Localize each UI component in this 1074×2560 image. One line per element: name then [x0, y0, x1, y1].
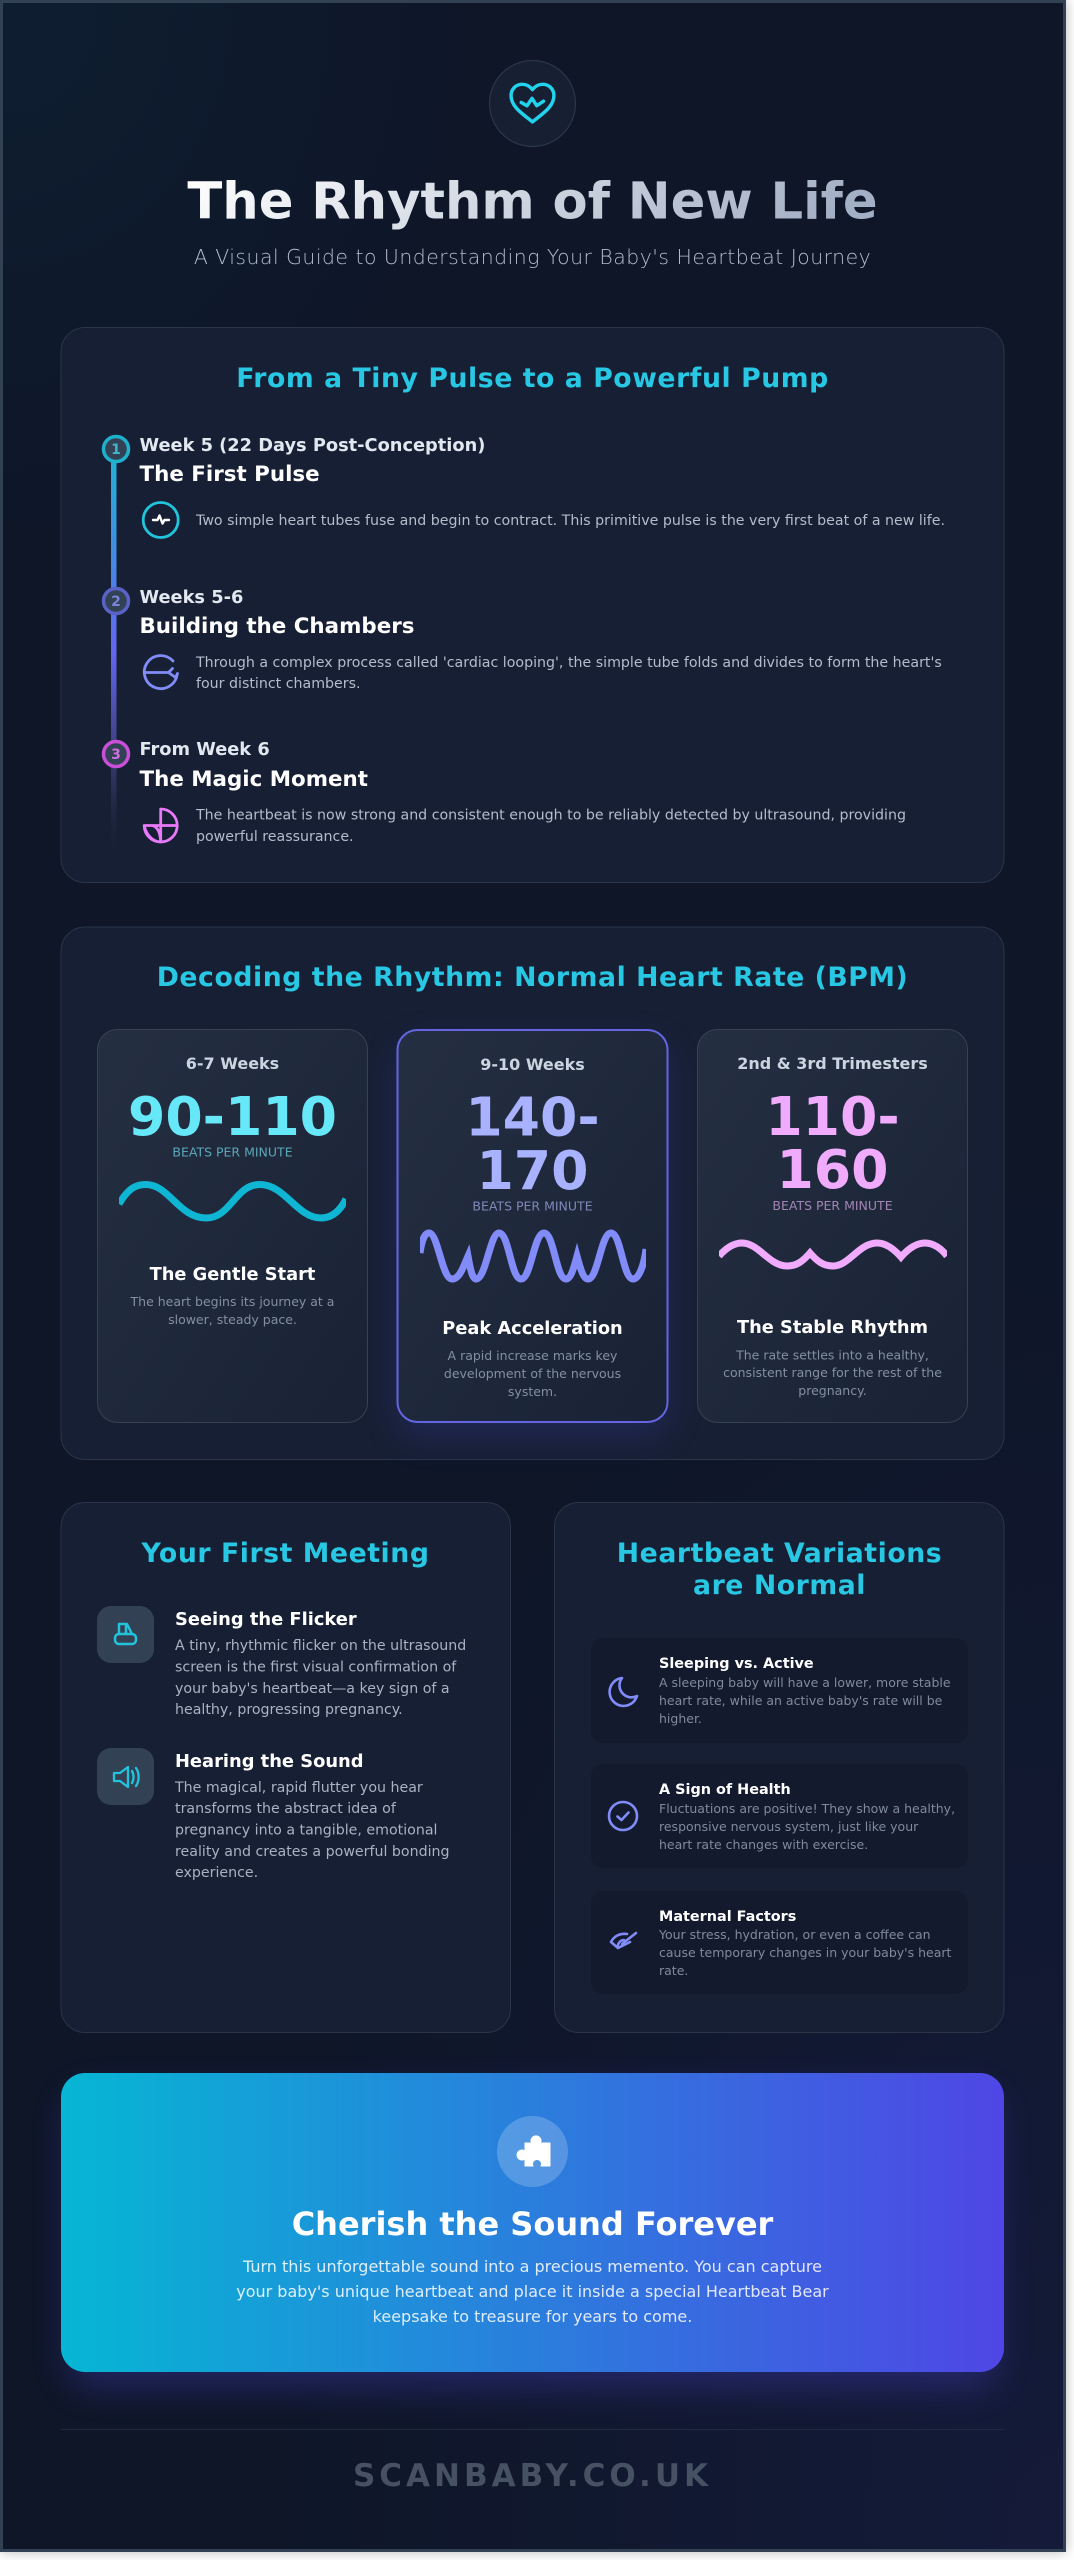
item: hearing the sound: reality and creates a powerful bonding [175, 1844, 450, 1860]
card: 9-10 weeks: A rapid increase marks key [448, 1348, 618, 1363]
item: sign of health: heart rate changes with exercise. [659, 1837, 868, 1852]
card: 6-7 weeks: The Gentle Start [150, 1264, 316, 1285]
item: hearing the sound: transforms the abstract idea of [175, 1801, 397, 1817]
card: 6-7 weeks: BEATS PER MINUTE [172, 1144, 293, 1160]
item: seeing the flicker: Seeing the Flicker [175, 1609, 357, 1630]
step 1: The First Pulse [140, 462, 320, 487]
card: trimesters: 160 [776, 1138, 889, 1201]
card: 9-10 weeks: 140- [465, 1086, 600, 1148]
item: sleeping vs active: Sleeping vs. Active [659, 1656, 814, 1672]
icon: heart with pulse [490, 60, 576, 146]
heading: cherish: Cherish the Sound Forever [292, 2205, 774, 2243]
item: maternal factors: Maternal Factors [659, 1909, 796, 1925]
step 2: Through a complex process called 'cardiac looping', the simple tube folds and divides to form the heart's [195, 655, 942, 671]
step 2: Weeks 5-6 [140, 587, 243, 608]
item: hearing the sound: Hearing the Sound [175, 1751, 364, 1772]
item: sleeping vs active: heart rate, while an active baby's rate will be [659, 1693, 943, 1708]
icon: moon [610, 1678, 637, 1706]
card: 6-7 weeks: 90-110 [128, 1085, 337, 1148]
item: sign of health: A Sign of Health [659, 1782, 791, 1798]
text: cherish body [236, 2257, 829, 2326]
text: cherish body: your baby's unique heartbeat and place it inside a special Heartbeat Bear [236, 2282, 829, 2301]
icon: pie of chambers [144, 809, 177, 842]
heading: variations [617, 1538, 942, 1601]
panel: heart rate [61, 927, 1004, 1460]
timeline line [111, 449, 116, 854]
item: seeing the flicker: healthy, progressing pregnancy. [175, 1702, 403, 1718]
step 2: four distinct chambers. [196, 676, 360, 692]
card: 9-10 weeks [397, 1030, 668, 1436]
footer brand: SCANBABY.CO.UK [353, 2458, 712, 2494]
panel: variations [554, 1502, 1004, 2032]
card: trimesters: pregnancy. [798, 1383, 867, 1398]
step 1 [104, 435, 945, 538]
step 3: From Week 6 [140, 739, 270, 760]
item: sleeping vs active [591, 1638, 968, 1743]
card: trimesters: consistent range for the rest of the [723, 1365, 942, 1380]
card: 9-10 weeks: 170 [476, 1139, 589, 1202]
item: seeing the flicker: A tiny, rhythmic flicker on the ultrasound [175, 1638, 466, 1654]
card: 9-10 weeks: BEATS PER MINUTE [472, 1198, 593, 1214]
card: 9-10 weeks: development of the nervous [444, 1366, 621, 1381]
step 1: Two simple heart tubes fuse and begin to contract. This primitive pulse is the very first beat of a new life. [195, 513, 945, 529]
step 3 [104, 739, 906, 845]
step 1: Week 5 (22 Days Post-Conception) [140, 435, 485, 456]
icon: check circle [609, 1802, 637, 1830]
item: maternal factors [591, 1891, 968, 1994]
wave chart: peak [420, 1230, 646, 1282]
card: 9-10 weeks: Peak Acceleration [442, 1318, 623, 1339]
icon: gauge [611, 1933, 636, 1948]
card: 9-10 weeks: 9-10 Weeks [480, 1055, 585, 1074]
card: trimesters: The Stable Rhythm [737, 1317, 928, 1338]
item: maternal factors: Your stress, hydration, or even a coffee can [658, 1927, 931, 1942]
step 2: Building the Chambers [140, 614, 414, 639]
item: seeing the flicker [97, 1606, 466, 1718]
icon: puzzle piece [497, 2116, 568, 2187]
step 3: The Magic Moment [140, 767, 368, 792]
wave chart: stable [719, 1240, 947, 1270]
heading: heart rate: Decoding the Rhythm: Normal Heart Rate (BPM) [157, 962, 908, 993]
wave chart: gentle [119, 1181, 346, 1222]
step 2: 2 [111, 594, 121, 610]
step 1: 1 [111, 442, 121, 458]
card: trimesters [698, 1030, 968, 1422]
heading: variations: are Normal [693, 1570, 866, 1601]
card: trimesters: The rate settles into a healthy, [735, 1348, 929, 1362]
step 2 [104, 587, 942, 692]
heading: first meeting: Your First Meeting [141, 1538, 429, 1569]
title: The Rhythm of New Life [187, 172, 878, 232]
item: sign of health: Fluctuations are positive! They show a healthy, [659, 1801, 955, 1816]
header [187, 60, 878, 269]
item: sign of health: responsive nervous system, just like your [659, 1819, 919, 1834]
panel: first meeting [61, 1502, 510, 2032]
heading: timeline: From a Tiny Pulse to a Powerful Pump [236, 363, 829, 394]
text: cherish body: keepsake to treasure for years to come. [373, 2307, 692, 2326]
icon: speaker [114, 1767, 139, 1787]
card: 6-7 weeks: 6-7 Weeks [186, 1054, 279, 1073]
item: sign of health [591, 1764, 968, 1868]
item: hearing the sound: pregnancy into a tangible, emotional [175, 1822, 437, 1838]
panel: call to action [61, 2073, 1004, 2388]
card: 6-7 weeks [98, 1030, 368, 1422]
text: cherish body: Turn this unforgettable sound into a precious memento. You can capture [242, 2257, 822, 2276]
item: sleeping vs active: A sleeping baby will have a lower, more stable [659, 1675, 951, 1690]
subtitle: A Visual Guide to Understanding Your Baby's Heartbeat Journey [194, 245, 871, 269]
item: maternal factors: rate. [659, 1963, 688, 1978]
item: sleeping vs active: higher. [659, 1711, 702, 1726]
card: 9-10 weeks: system. [508, 1384, 557, 1399]
card: trimesters: BEATS PER MINUTE [772, 1198, 893, 1213]
icon: looping heart chambers [144, 656, 178, 689]
item: hearing the sound: experience. [175, 1865, 258, 1881]
card: trimesters: 2nd & 3rd Trimesters [737, 1054, 928, 1073]
step 3: The heartbeat is now strong and consistent enough to be reliably detected by ultrasound, providing [195, 808, 906, 824]
panel: timeline [61, 328, 1004, 882]
card: 6-7 weeks: The heart begins its journey at a [130, 1294, 334, 1309]
heading: variations: Heartbeat Variations [617, 1538, 942, 1569]
card: 6-7 weeks: slower, steady pace. [168, 1312, 297, 1327]
item: maternal factors: cause temporary changes in your baby's heart [659, 1945, 951, 1960]
icon: pulse circle [143, 502, 178, 538]
item: seeing the flicker: your baby's heartbeat—a key sign of a [175, 1681, 450, 1697]
card: trimesters: 110- [765, 1085, 900, 1148]
icon: ultrasound [115, 1624, 136, 1644]
item: seeing the flicker: screen is the first visual confirmation of [175, 1660, 457, 1676]
step 3: 3 [111, 747, 121, 763]
item: hearing the sound: The magical, rapid flutter you hear [174, 1780, 423, 1796]
item: hearing the sound [97, 1748, 450, 1881]
step 3: powerful reassurance. [196, 829, 354, 845]
